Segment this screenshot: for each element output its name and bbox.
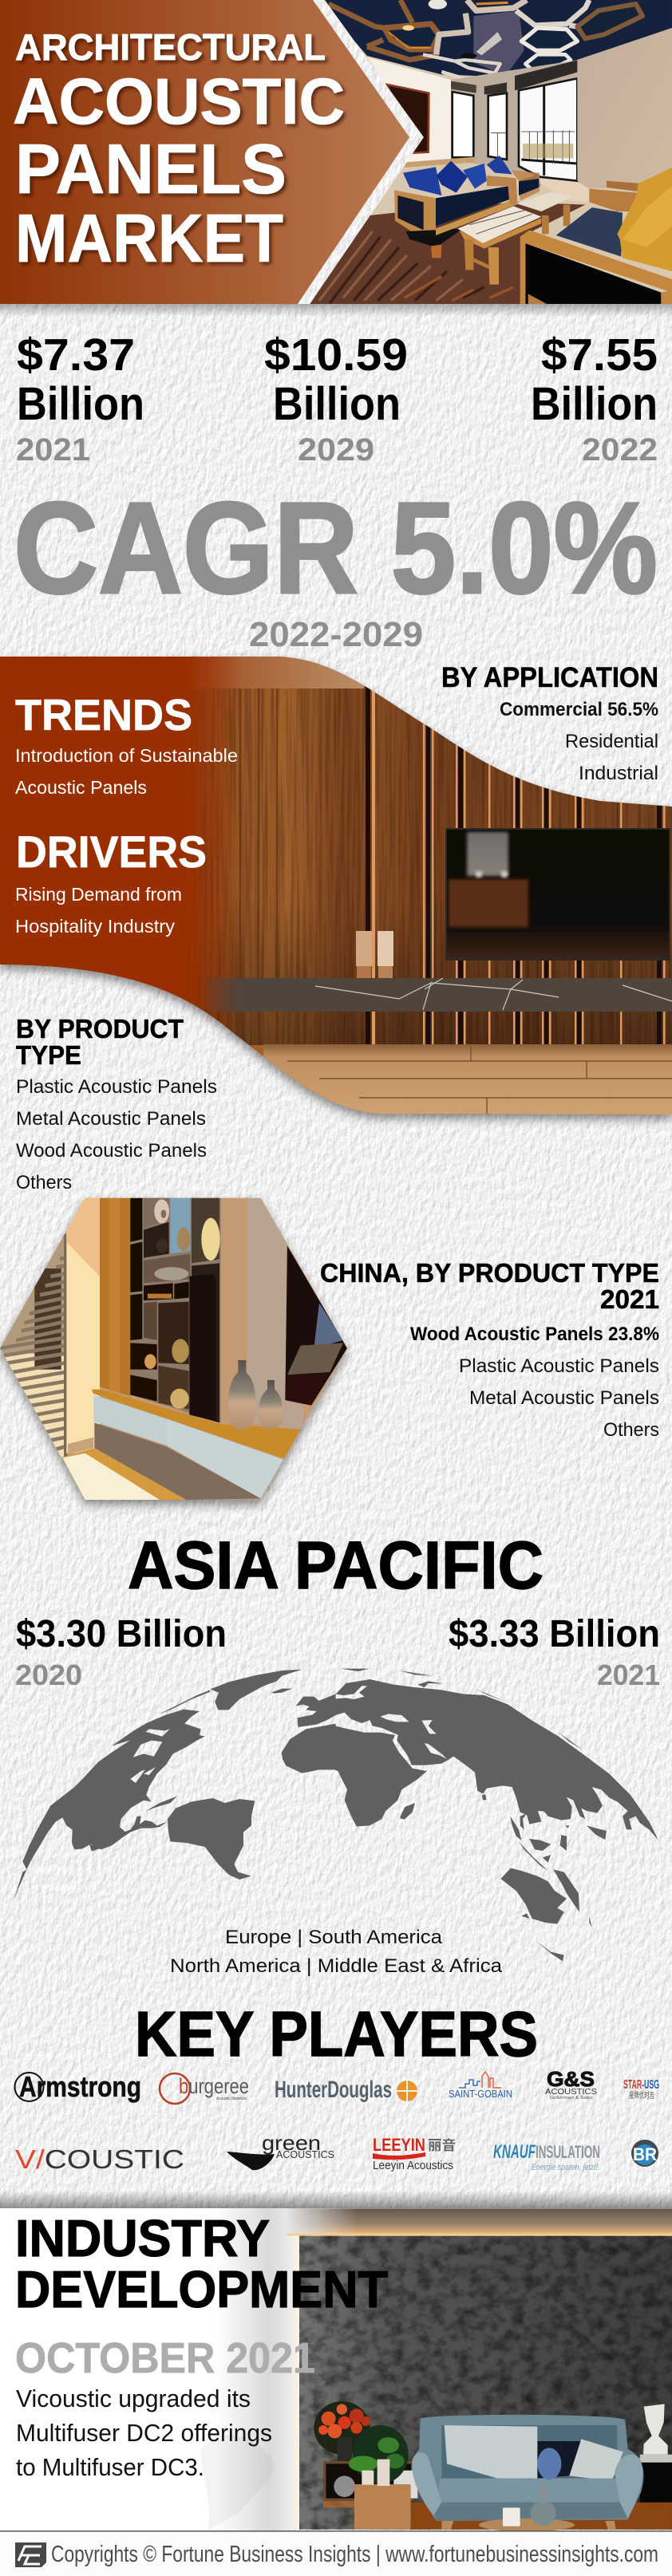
trends block — [15, 690, 238, 798]
logo: Green Acoustics: green — [262, 2131, 321, 2155]
map: americas and west — [14, 1670, 336, 1901]
china by product type block: Wood Acoustic Panels 23.8% — [410, 1324, 659, 1345]
logo: Star-USG: 星牌优时吉 — [629, 2090, 654, 2101]
asia pacific 2021 value — [449, 1613, 660, 1691]
title: ARCHITECTURAL — [15, 26, 326, 68]
logo: burgeree: burgeree — [179, 2074, 249, 2098]
sofa — [412, 2415, 643, 2530]
china by product type block: Metal Acoustic Panels — [469, 1387, 659, 1409]
regions list: North America | Middle East & Africa — [170, 1955, 503, 1977]
asia pacific 2020 value: $3.30 Billion — [16, 1613, 227, 1655]
wooden stump table — [354, 2460, 411, 2530]
logo: Knauf Insulation: Energie sparen, jetzt! — [532, 2163, 598, 2172]
glowing floor — [411, 2503, 672, 2530]
trends block: TRENDS — [15, 690, 192, 740]
logo: BR — [631, 2140, 658, 2167]
logo: burgeree — [160, 2073, 249, 2104]
development text: to Multifuser DC3. — [16, 2453, 204, 2481]
asia pacific 2020 value — [15, 1613, 227, 1691]
logo: Green Acoustics: ACOUSTICS — [276, 2148, 334, 2160]
logo: Vicoustic: V/COUSTIC — [15, 2144, 184, 2174]
wall shelf with sphere and books — [323, 2461, 417, 2507]
logo: Leeyin Acoustics: Leeyin Acoustics — [373, 2159, 453, 2172]
development text: Multifuser DC2 offerings — [16, 2419, 272, 2447]
vases — [356, 931, 393, 979]
tray, cup and glass vase — [479, 2448, 575, 2531]
CAGR period: 2022-2029 — [249, 615, 423, 654]
footer — [0, 2531, 672, 2576]
section shadow above industry development — [0, 2191, 672, 2208]
china by product type block — [320, 1258, 659, 1441]
industry development heading — [15, 2209, 388, 2318]
development text — [16, 2385, 272, 2481]
title: MARKET — [15, 201, 283, 277]
stat: 2029 value: 2029 — [298, 432, 374, 467]
logo: G&S Acoustics: Golterman & Sabo — [550, 2096, 592, 2101]
green plant — [349, 2425, 409, 2483]
stat: 2022 value — [531, 329, 658, 467]
stat: 2021 value: Billion — [17, 378, 144, 430]
title: ACOUSTIC — [13, 65, 345, 138]
stat: 2022 value: $7.55 — [541, 329, 658, 381]
stat: 2022 value: 2022 — [582, 432, 658, 467]
by product type block: Metal Acoustic Panels — [16, 1108, 206, 1130]
stat: 2021 value: 2021 — [16, 432, 90, 467]
by product type block: Wood Acoustic Panels — [16, 1140, 207, 1162]
logo: Knauf Insulation — [493, 2141, 600, 2172]
china by product type block: Others — [603, 1419, 659, 1441]
flowers — [314, 2401, 370, 2461]
drivers block: Rising Demand from — [15, 884, 182, 905]
logo: G&S Acoustics — [545, 2067, 597, 2101]
china by product type block: 2021 — [600, 1284, 659, 1314]
drivers block: DRIVERS — [16, 826, 207, 877]
header shadow — [0, 304, 672, 317]
logo: Hunter Douglas: HunterDouglas — [275, 2077, 392, 2103]
logo: Green Acoustics — [227, 2131, 334, 2170]
development date: OCTOBER 2021 — [15, 2334, 315, 2382]
logo: Leeyin Acoustics: LEEYIN — [373, 2135, 425, 2155]
heading: asia pacific: ASIA PACIFIC — [128, 1528, 544, 1603]
logo: Saint-Gobain — [449, 2072, 512, 2100]
regions list: Europe | South America — [225, 1927, 443, 1948]
logo: Star-USG — [623, 2078, 659, 2101]
logo: Leeyin Acoustics: 丽音 — [428, 2137, 456, 2153]
logo: burgeree: Acoustic Materials — [216, 2097, 247, 2101]
by product type block — [16, 1014, 217, 1193]
asia pacific 2021 value: $3.33 Billion — [449, 1613, 660, 1655]
cabinet and bust — [640, 2404, 672, 2503]
by product type block: TYPE — [16, 1040, 81, 1070]
logo: Knauf Insulation: KNAUF — [493, 2141, 536, 2163]
marble shelf — [206, 978, 672, 1012]
drivers block — [15, 826, 207, 937]
map: eurasia, africa and oceania — [334, 1669, 658, 1961]
industry development heading: DEVELOPMENT — [15, 2260, 388, 2318]
by application block: Commercial 56.5% — [500, 699, 658, 720]
world map — [14, 1669, 658, 1961]
by application block: BY APPLICATION — [441, 662, 658, 693]
logo: Knauf Insulation: INSULATION — [536, 2142, 600, 2162]
stat: 2029 value: Billion — [273, 378, 401, 430]
logo: Leeyin Acoustics — [373, 2135, 456, 2172]
icon: fortune business insights logo — [15, 2542, 46, 2567]
industry development heading: INDUSTRY — [15, 2209, 270, 2267]
logo: Armstrong: Armstrong — [19, 2070, 141, 2103]
logo: BR: BR — [633, 2144, 657, 2164]
concrete wall — [299, 2236, 672, 2530]
title: PANELS — [15, 129, 287, 208]
hexagon photo: shelving unit — [0, 1189, 351, 1508]
panel: industry development photo — [0, 2208, 672, 2531]
stat: 2022 value: Billion — [531, 378, 658, 430]
trends block: Introduction of Sustainable — [15, 745, 238, 766]
by product type block: Others — [16, 1172, 72, 1193]
by application block — [441, 662, 658, 784]
heading: key players: KEY PLAYERS — [135, 1998, 538, 2069]
wooden floor — [263, 1044, 672, 1116]
trends block: Acoustic Panels — [15, 777, 147, 798]
development text: Vicoustic upgraded its — [16, 2385, 251, 2412]
header photo: lounge interior — [303, 0, 672, 311]
television — [446, 829, 670, 960]
logo: Saint-Gobain: SAINT-GOBAIN — [449, 2088, 512, 2100]
panel: trends and drivers wave — [0, 654, 672, 1117]
by application block: Industrial — [579, 763, 658, 784]
header banner — [0, 0, 672, 317]
stat: 2021 value — [16, 329, 144, 467]
stat: 2029 value — [264, 329, 408, 467]
title — [13, 26, 345, 277]
by product type block: Plastic Acoustic Panels — [16, 1076, 217, 1098]
by product type block: BY PRODUCT — [16, 1014, 184, 1043]
drivers block: Hospitality Industry — [15, 916, 176, 937]
china by product type block: Plastic Acoustic Panels — [459, 1355, 659, 1377]
china by product type block: CHINA, BY PRODUCT TYPE — [320, 1258, 659, 1288]
stat: 2029 value: $10.59 — [264, 329, 408, 381]
logo: G&S Acoustics: G&S — [547, 2067, 595, 2091]
ghost plant — [201, 2435, 275, 2531]
stat: 2021 value: $7.37 — [17, 329, 135, 381]
logo: G&S Acoustics: ACOUSTICS — [545, 2088, 597, 2097]
asia pacific 2021 value: 2021 — [597, 1659, 660, 1691]
by application block: Residential — [565, 731, 658, 752]
asia pacific 2020 value: 2020 — [15, 1659, 82, 1691]
regions list — [170, 1927, 503, 1977]
